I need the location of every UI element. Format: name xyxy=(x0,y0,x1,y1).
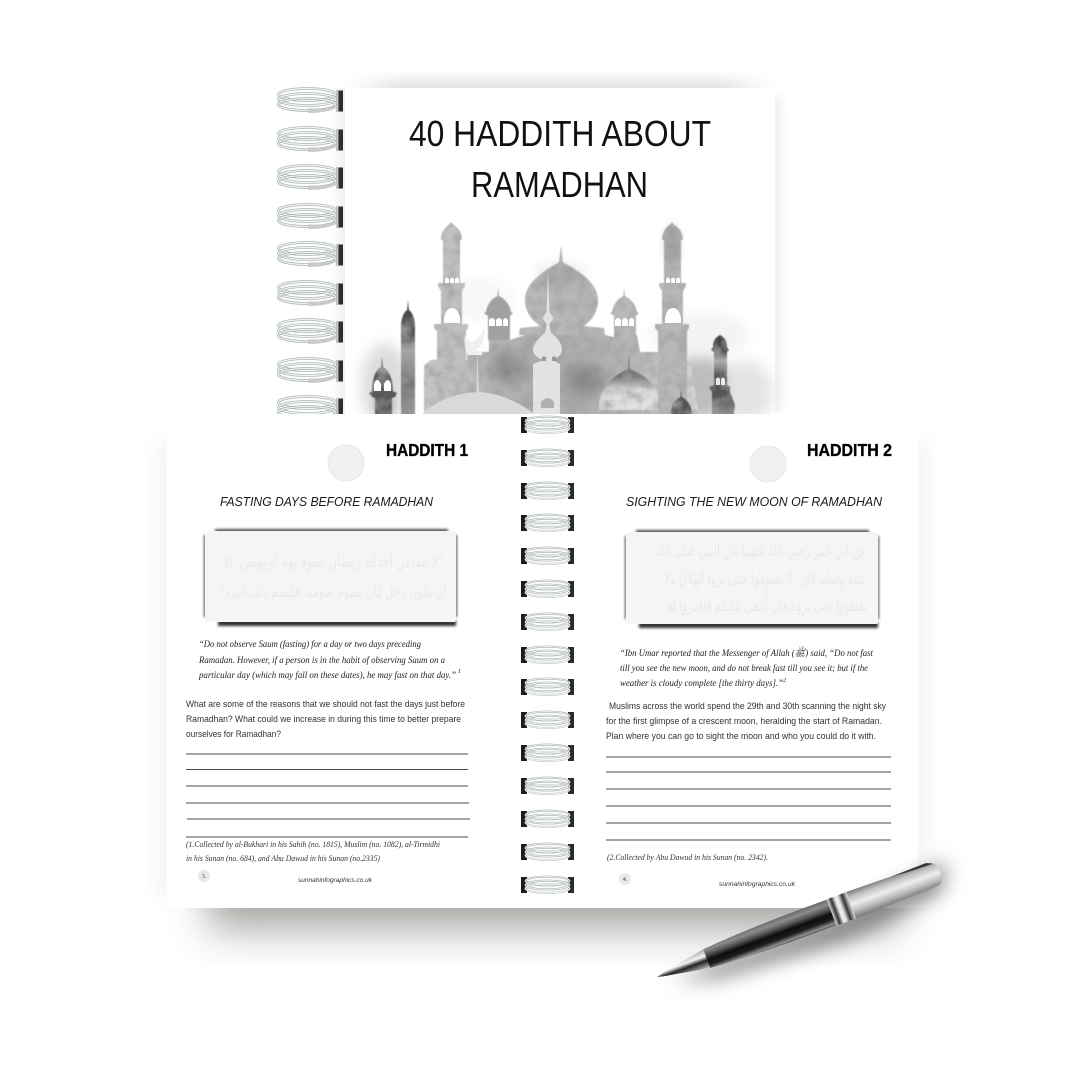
website: sunnahinfographics.co.uk xyxy=(298,877,373,884)
hadith translation: 1 xyxy=(458,669,461,675)
footnote: (2.Collected by Abu Dawud in his Sunan (no. 2342). xyxy=(607,853,768,862)
panel: left page, Haddith 1 xyxy=(186,440,470,884)
pen clip xyxy=(891,861,933,879)
binder hole xyxy=(328,444,364,482)
mosque silhouettes xyxy=(369,222,735,420)
arabic text card: أن يكون رجل كان يصوم صومه، فليصم ذلك اليوم" xyxy=(220,580,446,602)
hadith translation: “Do not observe Saum (fasting) for a day or two days preceding xyxy=(199,639,421,650)
hadith translation: till you see the new moon, and do not break fast till you see it; but if the xyxy=(620,663,869,674)
reflection prompt: Muslims across the world spend the 29th and 30th scanning the night sky xyxy=(609,700,886,711)
arabic text card xyxy=(204,529,458,626)
foreground pale minaret xyxy=(533,270,562,420)
hadith translation xyxy=(620,645,873,689)
hadith translation: 2 xyxy=(783,678,786,684)
cover shadow xyxy=(375,70,782,412)
pen tip xyxy=(654,949,710,986)
haze behind the mosque xyxy=(361,278,773,427)
arabic text card: عن ابن عمر رضي الله عنهما عن النبي صلى الله xyxy=(655,541,867,561)
hadith translation xyxy=(198,639,461,681)
pen barrel xyxy=(702,900,836,971)
reflection prompt: Plan where you can go to sight the moon and who you could do it with. xyxy=(606,730,876,741)
subtitle: SIGHTING THE NEW MOON OF RAMADHAN xyxy=(626,494,883,509)
heading: Haddith 1: HADDITH 1 xyxy=(386,440,468,460)
panel: open notebook spread xyxy=(167,414,918,908)
arabic text card: تفطروا حتى تروه فإن أغمي عليكم فاقدروا له xyxy=(667,594,867,616)
binder hole xyxy=(750,446,786,482)
spread shadow xyxy=(155,440,930,968)
writing lines xyxy=(606,757,891,840)
footnote: in his Sunan (no. 684), and Abu Dawud in his Sunan (no.2335) xyxy=(186,854,380,863)
icon: ballpoint pen xyxy=(652,859,945,990)
hadith translation: weather is cloudy complete [the thirty days].” xyxy=(620,678,783,689)
cover spiral rings xyxy=(278,88,345,421)
title xyxy=(409,113,711,205)
arabic text card: عليه وسلم قال: لا تصوموا حتى تروا الهلال ولا xyxy=(664,569,867,589)
reflection question xyxy=(186,698,465,739)
page number xyxy=(198,870,210,882)
hadith translation: particular day (which may fall on these dates), he may fast on that day.” xyxy=(198,670,456,681)
centre spiral binding xyxy=(521,417,574,893)
pen cap xyxy=(846,859,945,918)
title: 40 HADDITH ABOUT xyxy=(409,113,711,154)
arabic text card: "لا يتقدمن أحدكم رمضان بصوم يوم أو يومين، إلا xyxy=(223,550,443,572)
illustration: watercolor mosque xyxy=(361,222,773,427)
reflection prompt xyxy=(606,700,886,741)
crescent moon xyxy=(464,327,485,355)
writing lines xyxy=(186,754,470,837)
panel: right page, Haddith 2 xyxy=(606,440,892,888)
pale foreground dome xyxy=(420,352,537,416)
reflection prompt: for the first glimpse of a crescent moon, heralding the start of Ramadan. xyxy=(606,715,882,726)
reflection question: Ramadhan? What could we increase in during this time to better prepare xyxy=(186,713,461,724)
footnote xyxy=(186,840,441,863)
reflection question: ourselves for Ramadhan? xyxy=(186,728,281,739)
hadith translation: “Ibn Umar reported that the Messenger of Allah (ﷺ) said, “Do not fast xyxy=(620,645,873,659)
footnote: (1.Collected by al-Bukhari in his Sahih (no. 1815), Muslim (no. 1082), al-Tirmidhi xyxy=(186,840,441,849)
page number: 3. xyxy=(202,874,207,880)
windows xyxy=(374,278,725,391)
pen shadow xyxy=(667,861,960,1000)
heading: Haddith 2: HADDITH 2 xyxy=(807,440,892,460)
website: sunnahinfographics.co.uk xyxy=(719,881,796,888)
panel: notebook cover xyxy=(345,88,775,427)
metal rings xyxy=(827,892,856,926)
title: RAMADHAN xyxy=(471,164,648,205)
page number: 4. xyxy=(623,877,628,883)
page number xyxy=(619,873,631,885)
dark watercolor blooms xyxy=(374,225,680,415)
hadith translation: Ramadan. However, if a person is in the habit of observing Saum on a xyxy=(198,655,445,666)
subtitle: FASTING DAYS BEFORE RAMADHAN xyxy=(220,494,434,509)
arabic text card xyxy=(624,530,880,628)
reflection question: What are some of the reasons that we should not fast the days just before xyxy=(186,698,465,709)
